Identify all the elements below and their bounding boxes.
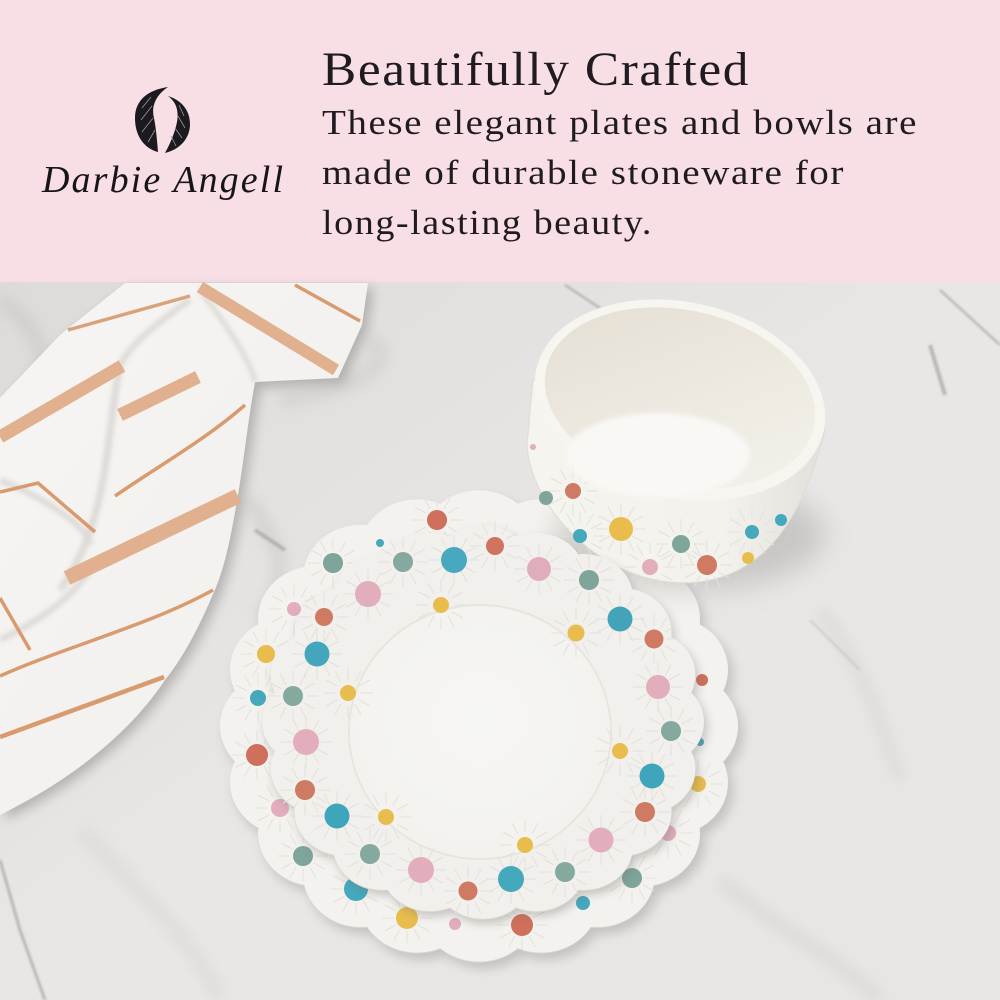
inner plate flowers xyxy=(268,521,696,916)
icon: angel wings xyxy=(135,87,190,153)
text block: description xyxy=(322,103,918,242)
inner plate xyxy=(262,521,707,924)
bowl xyxy=(516,274,844,592)
panel: pink header band xyxy=(0,0,1000,282)
heading: Beautifully Crafted xyxy=(322,43,750,96)
outer plate xyxy=(220,490,743,969)
logo: Darbie Angell xyxy=(41,87,283,201)
towel stripes xyxy=(0,285,360,737)
logo script wordmark: Darbie Angell xyxy=(41,159,283,201)
marble background xyxy=(0,282,1000,1000)
bowl rim and interior xyxy=(516,274,844,526)
inner plate well xyxy=(349,605,611,859)
outer plate flowers xyxy=(232,495,723,950)
text block: description: These elegant plates and bowls are xyxy=(322,103,918,142)
bowl body xyxy=(527,380,825,583)
towel xyxy=(0,283,373,820)
bowl flowers xyxy=(530,444,787,592)
text block: description: made of durable stoneware for xyxy=(322,153,845,192)
text block: description: long-lasting beauty. xyxy=(322,203,653,242)
